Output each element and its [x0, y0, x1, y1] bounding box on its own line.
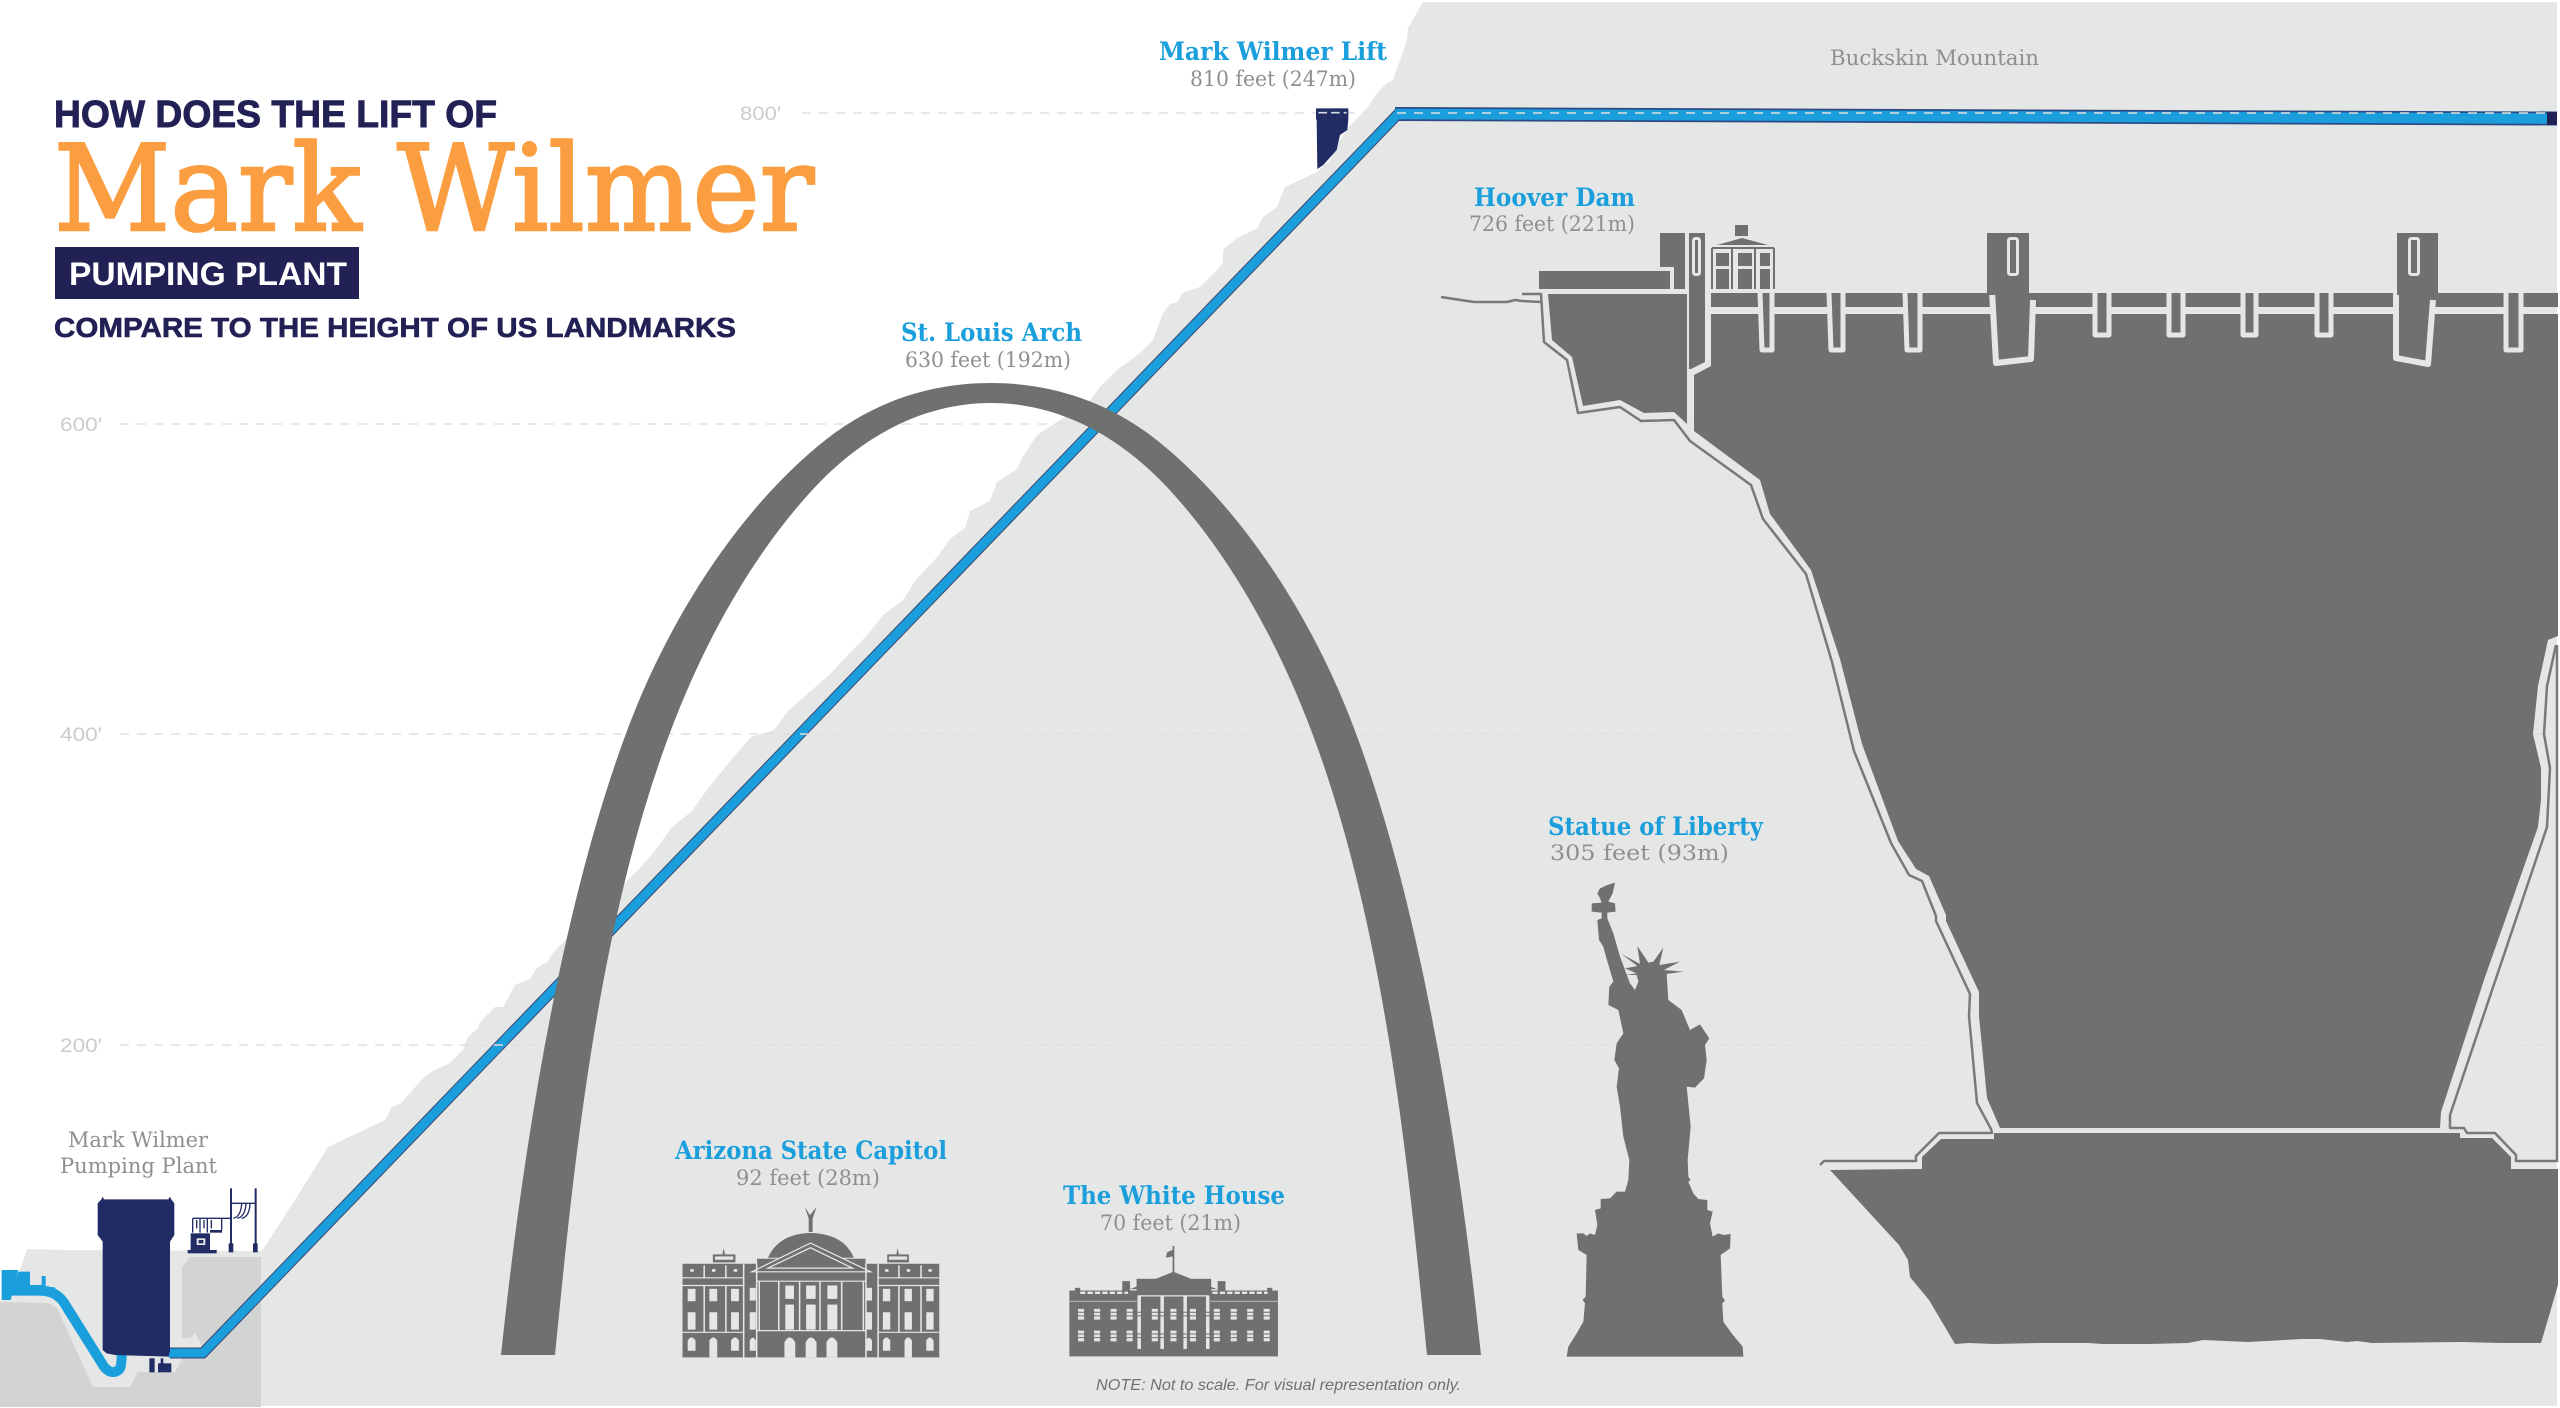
intake towers and buildings [1539, 225, 2438, 369]
label: Arizona State Capitol: Arizona State Capitol [674, 1136, 947, 1165]
intake pipe and reservoir [2, 1270, 122, 1372]
icon: Mark Wilmer lift top structure [1316, 108, 1348, 169]
badge: pumping plant [55, 247, 359, 299]
label: Mark Wilmer Lift [1159, 37, 1387, 91]
dam foundation [1830, 1133, 2558, 1344]
Hoover Dam silhouette [1441, 225, 2558, 1344]
icon: Arizona State Capitol [683, 1207, 939, 1357]
badge: pumping plant: PUMPING PLANT [69, 256, 347, 292]
label: Mark Wilmer Pumping Plant: Mark Wilmer [68, 1128, 209, 1152]
icon: The White House [1069, 1246, 1278, 1356]
label: Arizona State Capitol: 92 feet (28m) [736, 1166, 880, 1190]
label: Mark Wilmer Pumping Plant [60, 1128, 218, 1178]
label: Statue of Liberty: 305 feet (93m) [1550, 841, 1729, 865]
subheading: COMPARE TO THE HEIGHT OF US LANDMARKS [54, 312, 736, 343]
label: Buckskin Mountain: Buckskin Mountain [1830, 46, 2039, 70]
pipe end cap [2547, 112, 2557, 125]
label: Statue of Liberty [1548, 812, 1764, 865]
note: not to scale: NOTE: Not to scale. For visual representation only. [1096, 1377, 1461, 1394]
label: Hoover Dam: 726 feet (221m) [1469, 212, 1635, 236]
label: Hoover Dam: Hoover Dam [1474, 183, 1635, 212]
plant foundation: darker rock around the pumping plant [0, 1257, 261, 1407]
roadway band [1711, 293, 2558, 307]
label: St. Louis Arch: St. Louis Arch [901, 318, 1082, 347]
label: Arizona State Capitol [674, 1136, 947, 1190]
height grid lines with labels: 400′ [60, 725, 103, 746]
label: The White House: The White House [1063, 1181, 1285, 1210]
height grid lines with labels [60, 104, 2546, 1057]
switchyard transformer and towers [188, 1188, 258, 1253]
label: Statue of Liberty: Statue of Liberty [1548, 812, 1764, 841]
left abutment [1548, 294, 1687, 424]
icon: Mark Wilmer Pumping Plant building [98, 1188, 258, 1372]
label: The White House [1063, 1181, 1285, 1235]
label: Hoover Dam [1469, 183, 1635, 236]
height grid lines with labels: 600′ [60, 415, 103, 436]
canyon outline [1441, 294, 2557, 1165]
height grid lines with labels: 800′ [740, 104, 782, 125]
label: Mark Wilmer Lift: Mark Wilmer Lift [1159, 37, 1387, 66]
label: St. Louis Arch [901, 318, 1082, 372]
label: Mark Wilmer Lift: 810 feet (247m) [1190, 67, 1356, 91]
label: St. Louis Arch: 630 feet (192m) [905, 348, 1071, 372]
icon: Statue of Liberty [1567, 883, 1743, 1357]
height grid lines with labels: 200′ [60, 1036, 103, 1057]
title block [54, 94, 814, 343]
label: The White House: 70 feet (21m) [1100, 1211, 1241, 1235]
dam main body [1694, 314, 2558, 1128]
St. Louis Arch [501, 383, 1481, 1355]
label: Mark Wilmer Pumping Plant: Pumping Plant [60, 1154, 218, 1178]
piers and spillway slots [1760, 291, 2521, 364]
heading: Mark Wilmer: Mark Wilmer [54, 121, 814, 259]
heading line: how does the lift of: HOW DOES THE LIFT OF [54, 94, 497, 136]
